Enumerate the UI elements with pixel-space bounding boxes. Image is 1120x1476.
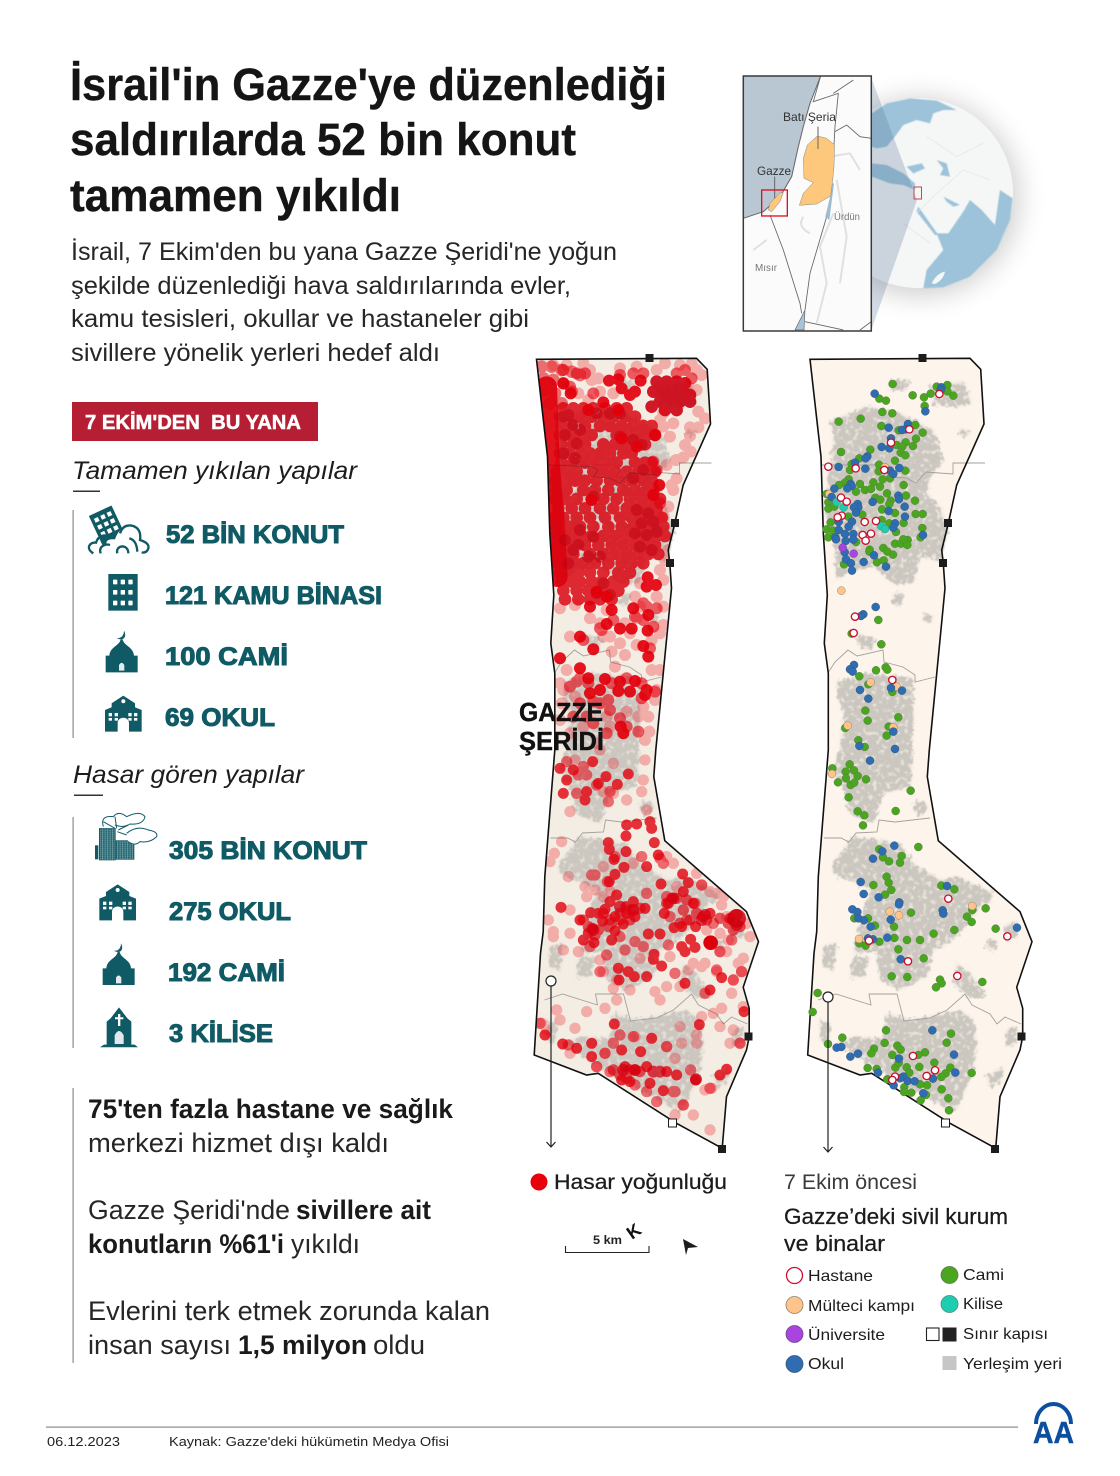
- icon: school: [105, 696, 142, 732]
- text block: key facts: 75'ten fazla hastane ve sağlık: [88, 1094, 454, 1124]
- dots: north and centre: [823, 380, 957, 753]
- legend: institutions: [786, 1266, 1062, 1373]
- icon: public building: [108, 574, 138, 611]
- legend heading: ve binalar: [784, 1231, 885, 1256]
- legend heading: 7 Ekim öncesi: [784, 1171, 917, 1194]
- inset map: Batı Şeria: [783, 110, 836, 124]
- footer: 06.12.2023: [47, 1434, 120, 1449]
- legend: institutions: Cami: [963, 1267, 1004, 1284]
- border gates: left map: [646, 354, 752, 1153]
- item: 3 kilise: 3 KİLİSE: [169, 1020, 273, 1048]
- inset map: Mısır: [755, 263, 778, 274]
- text block: key facts: merkezi hizmet dışı kaldı: [88, 1128, 389, 1158]
- item: 192 cami: 192 CAMİ: [168, 959, 285, 987]
- legend heading: Gazze’deki sivil kurum: [784, 1204, 1008, 1229]
- arrow: left map pointer: [546, 976, 556, 1147]
- text block: key facts: Gazze Şeridi'nde: [88, 1195, 290, 1225]
- text block: key facts: [72, 1088, 490, 1363]
- heading: damaged structures: Hasar gören yapılar: [73, 761, 306, 789]
- text block: key facts: insan sayısı: [88, 1330, 231, 1360]
- title: İsrail'in Gazze'ye düzenlediği: [70, 59, 667, 110]
- inset map: Ürdün: [834, 211, 860, 223]
- item: 305 bin konut: 305 BİN KONUT: [169, 837, 367, 865]
- arrow: right map pointer: [823, 992, 833, 1152]
- map label: Gazze Şeridi: ŞERİDİ: [519, 726, 604, 756]
- item: 121 kamu binası: 121 KAMU BİNASI: [165, 582, 382, 610]
- icon: collapsed building: [87, 505, 149, 553]
- inset map: Gazze: [757, 164, 791, 178]
- icon: mosque: [103, 943, 135, 985]
- title: tamamen yıkıldı: [70, 170, 401, 221]
- legend: institutions: Mülteci kampı: [808, 1298, 915, 1315]
- scale bar: [566, 1233, 649, 1252]
- map: damage density: [534, 358, 758, 1148]
- inset map: [743, 76, 871, 331]
- icon: mosque: [106, 631, 138, 672]
- title: [70, 59, 667, 221]
- text block: key facts: konutların %61'i: [88, 1229, 284, 1259]
- text block: key facts: oldu: [373, 1330, 425, 1360]
- title: saldırılarda 52 bin konut: [70, 114, 576, 165]
- map label: Gazze Şeridi: GAZZE: [519, 697, 603, 727]
- map label: Gazze Şeridi: [519, 697, 604, 756]
- logo: AA: AA: [1033, 1415, 1074, 1450]
- item: 275 okul: 275 OKUL: [169, 898, 291, 926]
- icon: damaged building: [95, 813, 157, 860]
- scale bar: 5 km: [593, 1233, 622, 1247]
- item: 52 bin konut: 52 BİN KONUT: [166, 521, 344, 549]
- legend: damage density: Hasar yoğunluğu: [554, 1171, 727, 1194]
- text block: key facts: yıkıldı: [291, 1229, 360, 1259]
- intro text: şekilde düzenlediği hava saldırılarında evler,: [71, 272, 571, 300]
- globe locator box: [914, 187, 922, 199]
- text block: key facts: sivillere ait: [296, 1195, 431, 1225]
- item: 100 cami: 100 CAMİ: [165, 643, 288, 671]
- legend: institutions: Okul: [808, 1356, 844, 1373]
- north arrow: [623, 1219, 698, 1255]
- intro text: sivillere yönelik yerleri hedef aldı: [71, 339, 440, 367]
- item: 69 okul: 69 OKUL: [165, 704, 275, 732]
- banner: 7 Ekim'den bu yana: 7 EKİM'DEN BU YANA: [85, 411, 301, 434]
- footer: [46, 1426, 1018, 1449]
- map: civil institutions: [808, 358, 1032, 1148]
- heading: destroyed structures: Tamamen yıkılan yapılar: [72, 457, 359, 485]
- legend: institutions: Kilise: [963, 1296, 1003, 1313]
- north arrow: K: [623, 1219, 645, 1243]
- legend: institutions: Yerleşim yeri: [963, 1356, 1062, 1373]
- text block: key facts: Evlerini terk etmek zorunda kalan: [88, 1296, 490, 1326]
- intro text: [71, 237, 617, 367]
- banner: 7 Ekim'den bu yana: [72, 402, 318, 441]
- intro text: kamu tesisleri, okullar ve hastaneler gibi: [71, 305, 529, 333]
- projection wedge: [871, 77, 917, 331]
- legend: institutions: Üniversite: [808, 1326, 885, 1344]
- icon: school: [99, 884, 136, 920]
- legend: institutions: Hastane: [808, 1268, 873, 1285]
- border gates: right map: [918, 354, 1026, 1153]
- icon: church: [100, 1007, 138, 1047]
- intro text: İsrail, 7 Ekim'den bu yana Gazze Şeridi'ne yoğun: [71, 237, 617, 266]
- text block: key facts: 1,5 milyon: [238, 1330, 367, 1360]
- dots: south: [809, 757, 1021, 1114]
- footer: Kaynak: Gazze'deki hükümetin Medya Ofisi: [169, 1434, 449, 1449]
- legend heading: [784, 1171, 1008, 1256]
- locator globe: [822, 98, 1018, 295]
- legend: institutions: Sınır kapısı: [963, 1326, 1048, 1343]
